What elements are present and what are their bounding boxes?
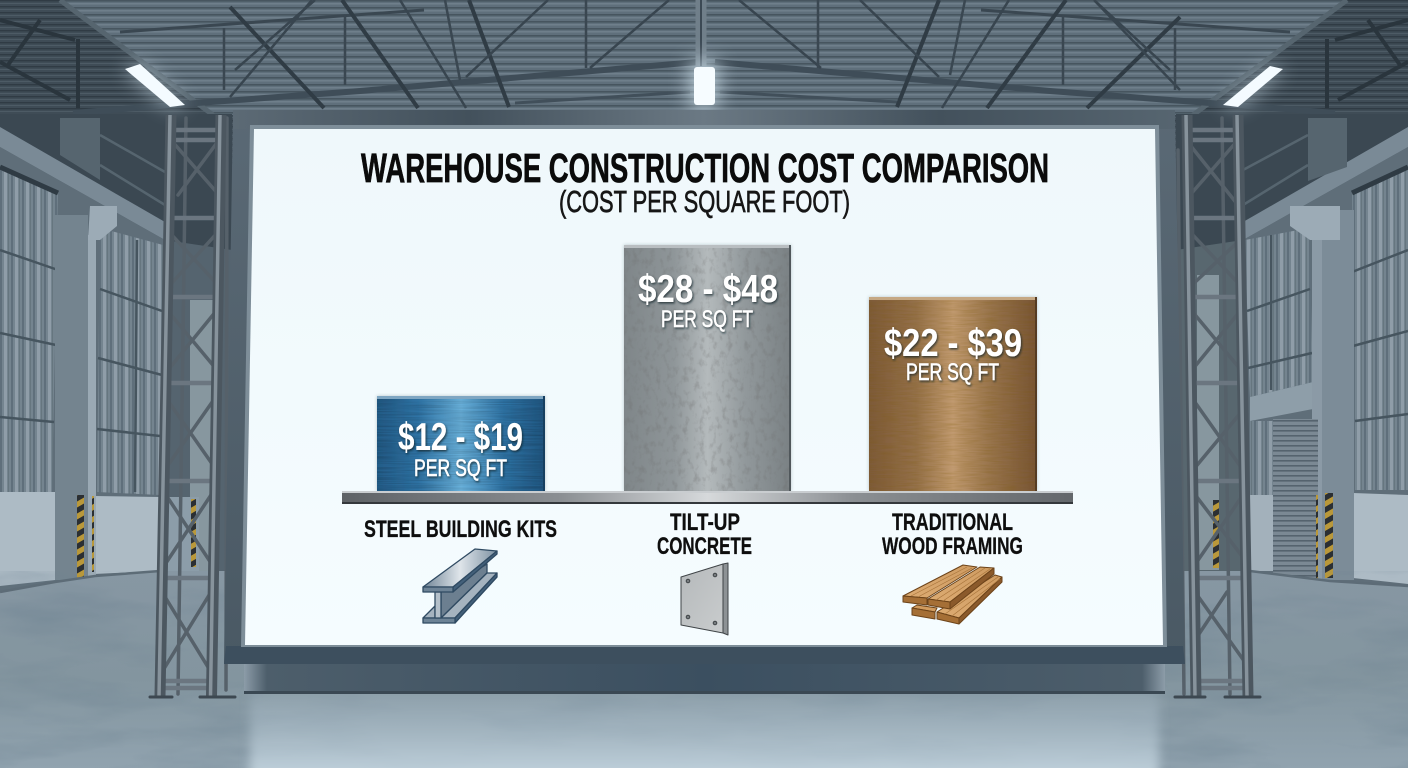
ceiling lights (125, 60, 1283, 110)
unit: concrete: PER SQ FT (661, 306, 753, 333)
hazard stripes (1213, 493, 1333, 579)
bar: tilt-up concrete (624, 245, 791, 491)
left wall (0, 114, 232, 592)
label: traditional wood framing (882, 509, 1023, 560)
left truss tower (150, 115, 235, 697)
label: traditional wood framing: TRADITIONAL (892, 509, 1013, 536)
roller door (1273, 419, 1318, 581)
icon: wood planks (903, 565, 1002, 624)
value: wood: $22 - $39 (884, 322, 1022, 365)
corrugated wall panels (1245, 167, 1408, 495)
bar: traditional wood framing (869, 297, 1037, 491)
corrugated wall panels (0, 167, 163, 495)
left light (125, 64, 185, 107)
value: concrete: $28 - $48 (638, 268, 778, 311)
bar: steel building kits (377, 396, 545, 491)
ceiling (0, 0, 1408, 240)
label: tilt-up concrete (657, 509, 752, 560)
subtitle: (COST PER SQUARE FOOT) (559, 184, 850, 219)
floor (0, 571, 1408, 768)
hazard stripes (77, 495, 196, 579)
label: traditional wood framing: WOOD FRAMING (882, 533, 1023, 560)
billboard screen (245, 129, 1163, 645)
label: tilt-up concrete: CONCRETE (657, 533, 752, 560)
title: WAREHOUSE CONSTRUCTION COST COMPARISON (361, 145, 1049, 191)
value: steel: $12 - $19 (398, 416, 523, 459)
pillar (1290, 206, 1354, 580)
lintel above door (1250, 382, 1313, 421)
billboard base (244, 663, 1165, 693)
right wall (1176, 114, 1408, 590)
label: steel building kits: STEEL BUILDING KITS (364, 516, 557, 543)
right light (1223, 66, 1283, 107)
billboard frame (224, 110, 1185, 664)
glow (125, 60, 1283, 110)
pillar (55, 206, 117, 580)
billboard (224, 110, 1185, 694)
right truss tower (1175, 115, 1260, 697)
icon: concrete panel (681, 563, 728, 635)
centre light (694, 67, 715, 105)
chart (342, 145, 1073, 635)
icon: steel I-beam (423, 549, 497, 623)
lower wall (1353, 493, 1408, 584)
unit: steel: PER SQ FT (414, 455, 507, 482)
label: tilt-up concrete: TILT-UP (670, 509, 740, 536)
lower wall (0, 492, 55, 586)
unit: wood: PER SQ FT (906, 359, 999, 386)
baseline shelf (342, 491, 1073, 504)
